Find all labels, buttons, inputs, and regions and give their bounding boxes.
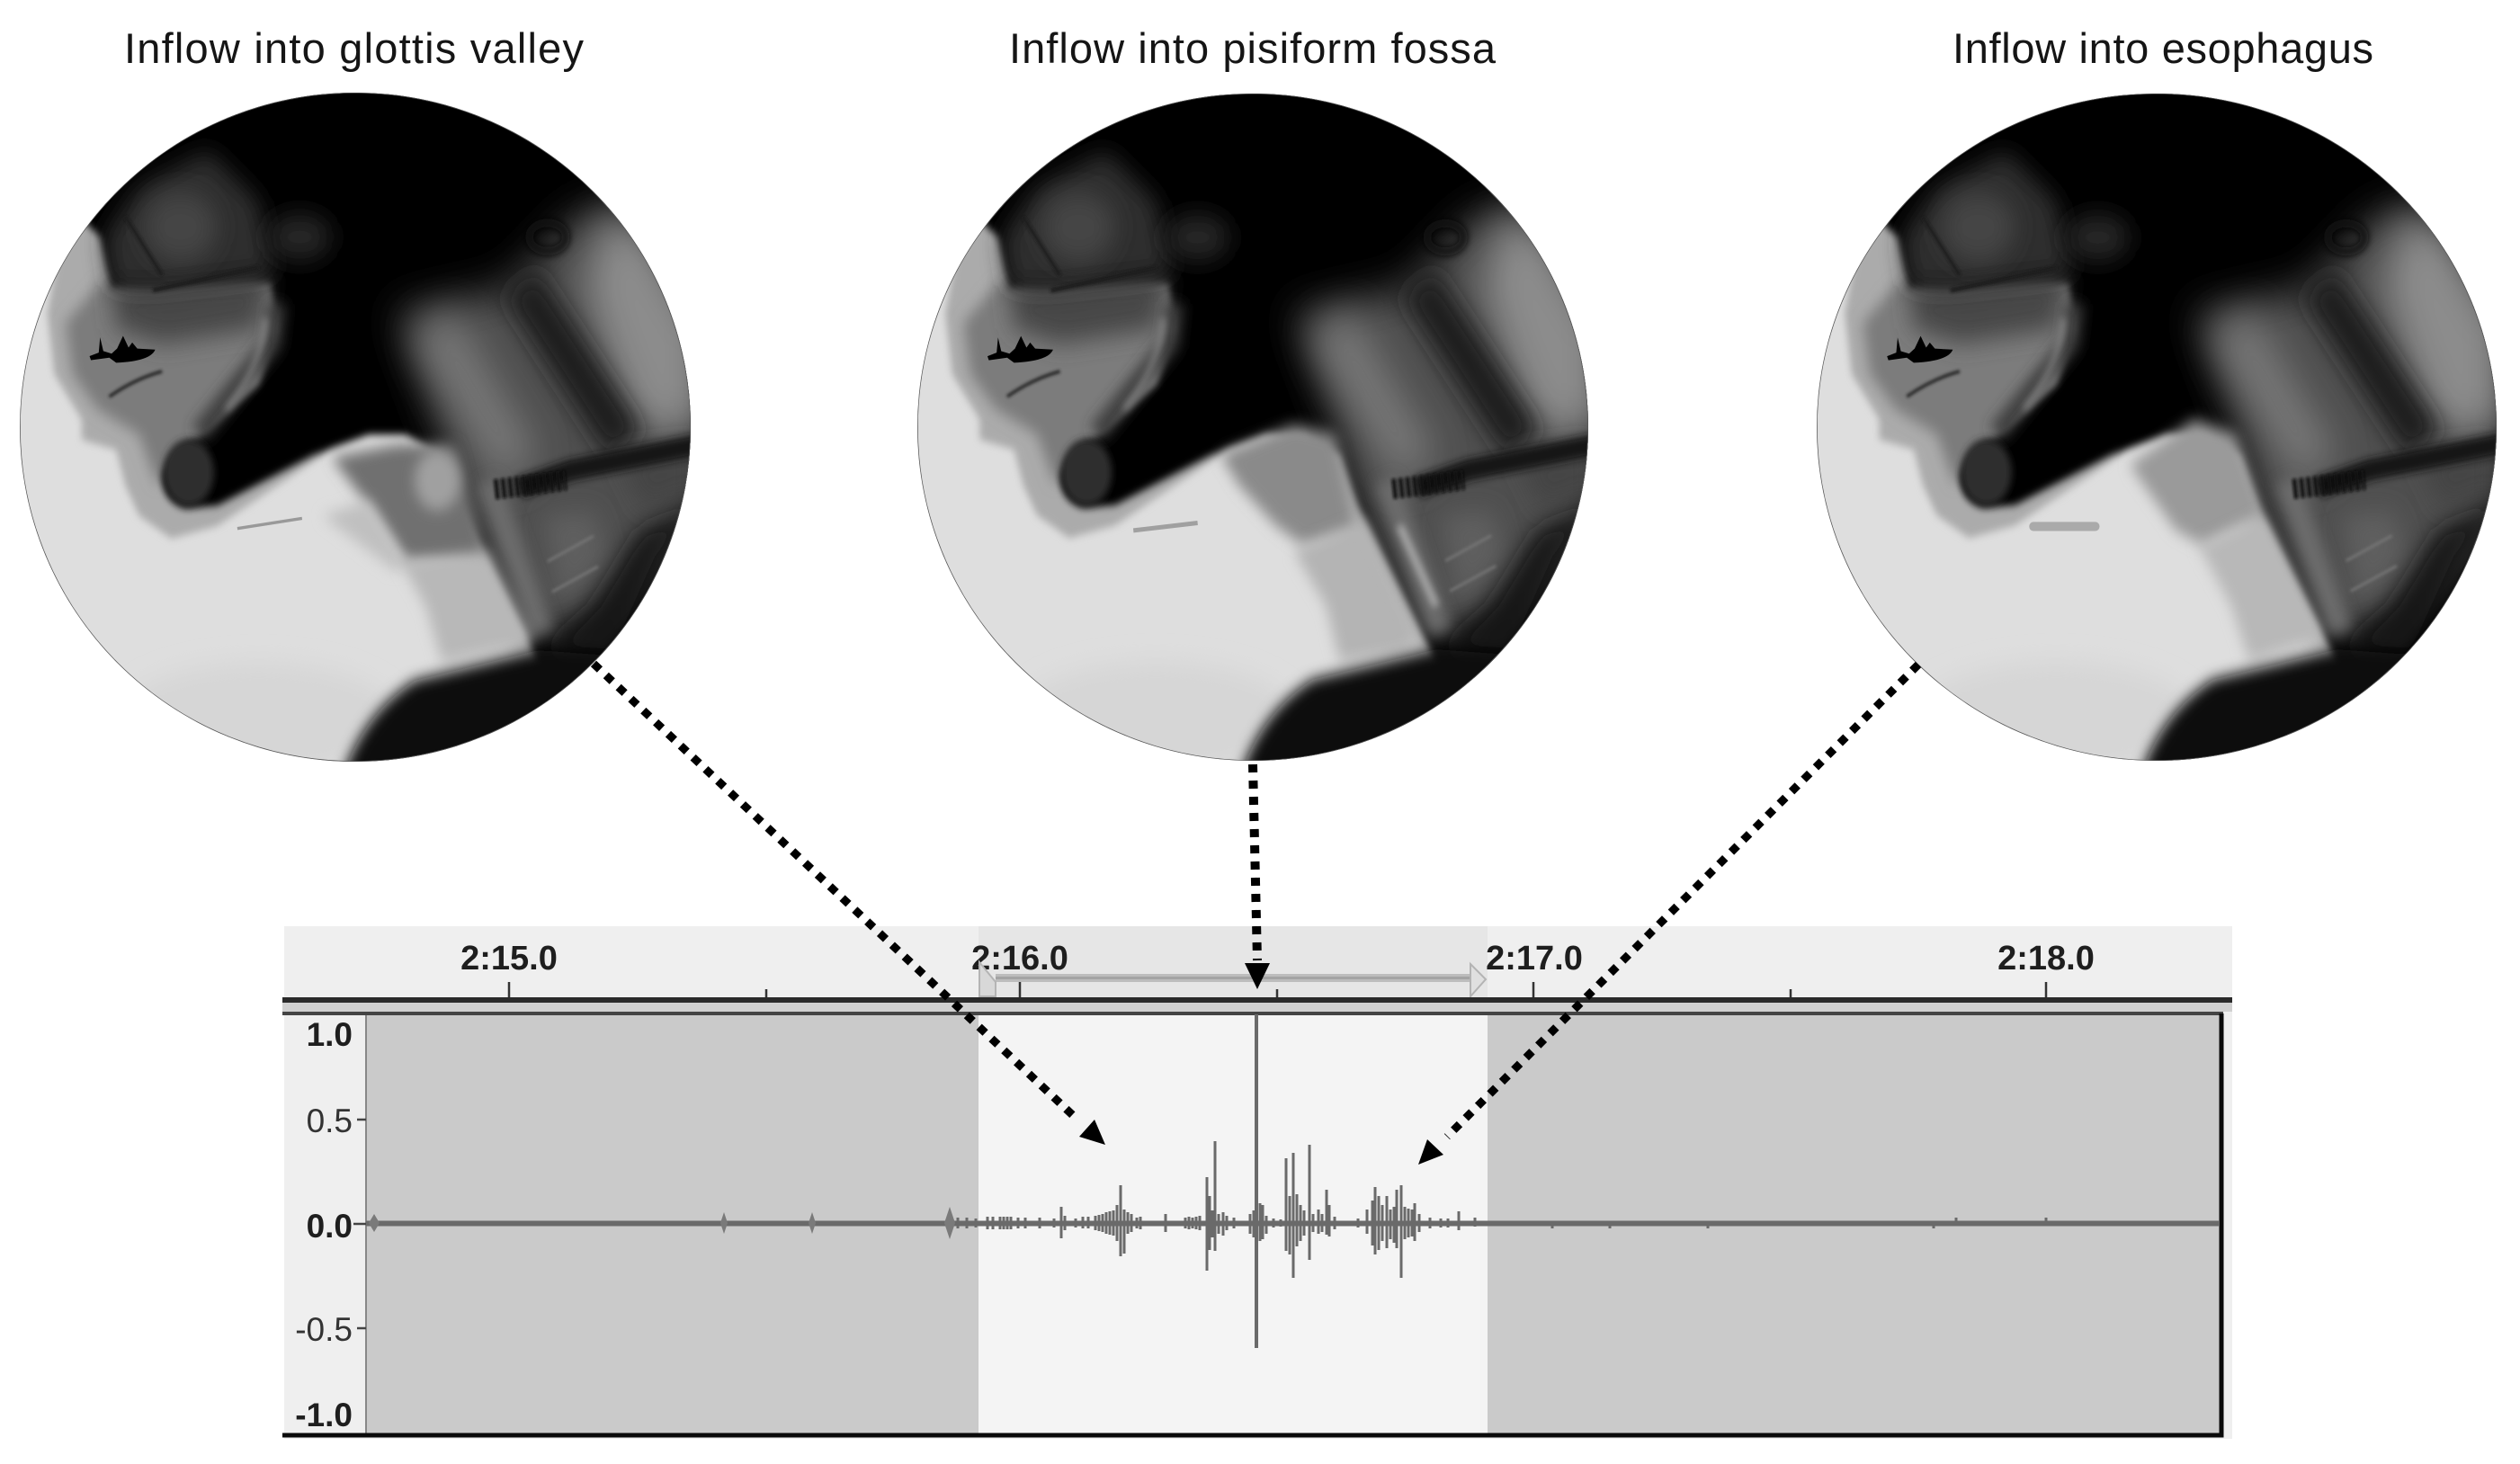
dotted arrow: pisiform fossa to main sound	[1245, 764, 1270, 989]
dotted arrow: esophagus to last sound	[1418, 665, 1918, 1165]
ruler border lines	[282, 997, 2232, 1003]
amplitude axis labels: 0.5	[307, 1102, 353, 1139]
plot: unselected region left	[366, 1015, 979, 1433]
amplitude axis labels	[295, 1016, 353, 1433]
selection range bar	[979, 962, 1486, 996]
time ruler ticks	[509, 982, 2046, 1000]
x-ray: inflow into glottis valley	[20, 93, 691, 762]
time labels	[460, 940, 2095, 977]
heading: pisiform fossa: Inflow into pisiform fossa	[1009, 24, 1497, 72]
amplitude axis labels: 0.0	[307, 1208, 353, 1245]
plot: selected region	[979, 1015, 1488, 1433]
dotted arrow: glottis valley to first sound	[594, 664, 1105, 1145]
time labels: 2:16.0	[971, 940, 1068, 977]
heading: glottis valley: Inflow into glottis valley	[124, 24, 585, 72]
time labels: 2:15.0	[460, 940, 558, 977]
selected range in ruler	[979, 926, 1488, 1000]
x-ray: inflow into pisiform fossa	[917, 94, 1588, 761]
time labels: 2:17.0	[1486, 940, 1583, 977]
plot border	[282, 1013, 2221, 1435]
plot: unselected region right	[1488, 1015, 2221, 1433]
amplitude ticks	[353, 1120, 366, 1328]
x-ray: inflow into esophagus	[1817, 94, 2497, 761]
heading: esophagus: Inflow into esophagus	[1953, 24, 2373, 72]
audio waveform panel	[282, 926, 2232, 1439]
time labels: 2:18.0	[1997, 940, 2095, 977]
amplitude axis labels: -1.0	[295, 1397, 353, 1433]
amplitude axis labels: -0.5	[295, 1311, 353, 1348]
amplitude axis labels: 1.0	[307, 1016, 353, 1053]
waveform	[366, 1014, 2219, 1348]
panel background	[284, 926, 2232, 1439]
